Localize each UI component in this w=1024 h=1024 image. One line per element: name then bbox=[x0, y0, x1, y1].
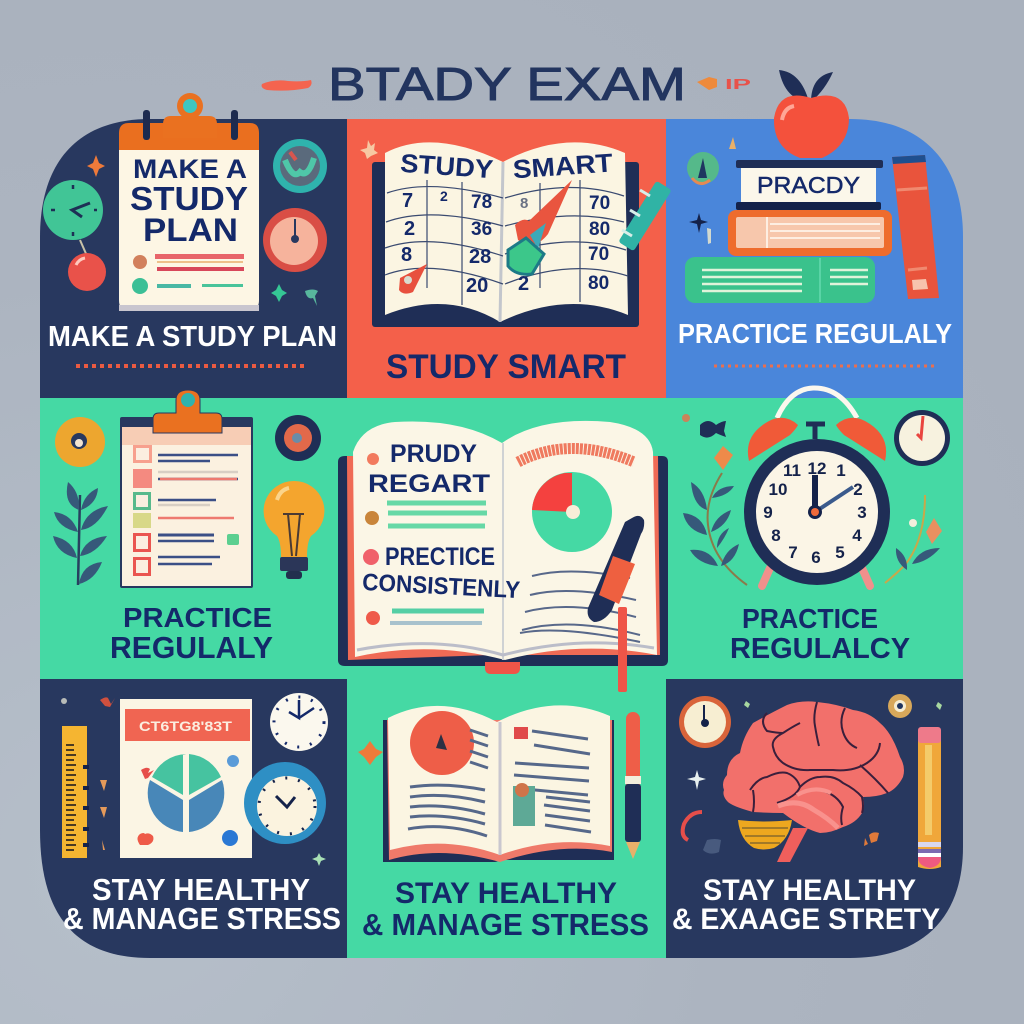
dotted divider bbox=[76, 364, 308, 368]
panel: make a study plan bbox=[43, 93, 337, 366]
ribbon bbox=[618, 607, 627, 692]
blue clock bbox=[244, 762, 326, 844]
small doodles bbox=[61, 697, 326, 866]
panel: practice regularly left: REGULALY bbox=[110, 630, 273, 665]
alarm clock: 3 bbox=[857, 503, 867, 522]
panel: practice regularly top bbox=[678, 70, 952, 366]
icon: brain bbox=[723, 701, 904, 862]
panel: alarm clock bbox=[682, 388, 950, 665]
small doodles bbox=[683, 694, 942, 854]
book stack bbox=[685, 155, 939, 303]
book pages bbox=[353, 421, 657, 660]
icon: red timer bbox=[263, 208, 327, 272]
open calendar book: 70 bbox=[589, 193, 610, 214]
left page text bbox=[362, 440, 521, 625]
alarm clock: 9 bbox=[763, 503, 773, 522]
alarm clock: 4 bbox=[852, 526, 862, 545]
small icons bbox=[687, 137, 736, 244]
alarm clock bbox=[744, 388, 890, 586]
icon: apple on books bbox=[774, 70, 849, 158]
panel: stay healthy left bbox=[61, 693, 341, 936]
panel: center open book bbox=[338, 421, 668, 692]
left page text: REGART bbox=[368, 470, 490, 498]
orange page edges bbox=[347, 456, 660, 660]
pen bbox=[625, 712, 641, 859]
study plan notepad bbox=[119, 93, 259, 311]
label: practice regularly: PRACTICE bbox=[742, 603, 878, 634]
pie chart report bbox=[120, 699, 252, 858]
icon: apple bbox=[68, 240, 106, 291]
alarm clock: 12 bbox=[808, 459, 826, 478]
study plan notepad: STUDY bbox=[130, 180, 248, 217]
alarm clock: 7 bbox=[788, 543, 798, 562]
alarm clock: 1 bbox=[836, 461, 846, 480]
alarm clock: 6 bbox=[811, 548, 821, 567]
open calendar book: 28 bbox=[469, 246, 491, 268]
label: practice regulaly: PRACTICE bbox=[123, 602, 272, 633]
label: make a study plan: MAKE A STUDY PLAN bbox=[48, 321, 337, 353]
small leaves left bbox=[683, 473, 747, 585]
open calendar book: 80 bbox=[588, 273, 609, 294]
panel: stay healthy middle bbox=[358, 705, 649, 942]
title bbox=[262, 58, 751, 110]
book cover bbox=[338, 456, 668, 666]
panel: practice regularly left bbox=[53, 390, 324, 665]
study plan notepad: PLAN bbox=[143, 212, 238, 248]
panel: stay healthy middle: & MANAGE STRESS bbox=[362, 907, 649, 942]
open calendar book: 36 bbox=[471, 219, 492, 240]
open calendar book: 20 bbox=[466, 275, 488, 297]
sparkles bbox=[87, 155, 318, 306]
study plan notepad: MAKE A bbox=[133, 154, 247, 184]
sparkle bbox=[358, 741, 383, 765]
label: stay healthy & manage stress: STAY HEALTHY bbox=[92, 872, 310, 907]
label: stay healthy & manage stress: STAY HEALTHY bbox=[395, 877, 617, 910]
open calendar book: STUDY bbox=[399, 148, 494, 184]
open calendar book bbox=[372, 142, 672, 327]
right page chart bbox=[518, 448, 640, 642]
panel backgrounds bbox=[40, 119, 966, 959]
pen bbox=[588, 516, 644, 622]
open calendar book: 8 bbox=[520, 195, 528, 212]
open calendar book: 7 bbox=[402, 190, 413, 212]
open calendar book: 8 bbox=[401, 244, 412, 266]
icon: checklist clipboard bbox=[120, 390, 253, 588]
open calendar book: 2 bbox=[440, 188, 448, 204]
icon: light bulb bbox=[264, 481, 324, 579]
pie chart report: CT6TG8'83T bbox=[139, 718, 233, 734]
small leaves right bbox=[885, 495, 942, 583]
white clock bbox=[270, 693, 328, 751]
panel: stay healthy left: & MANAGE STRESS bbox=[63, 901, 341, 936]
open calendar book: 80 bbox=[589, 219, 610, 240]
alarm clock: 11 bbox=[783, 461, 801, 480]
icon: pencil bbox=[918, 727, 941, 869]
open calendar book: 78 bbox=[471, 192, 492, 213]
dotted divider bbox=[714, 364, 935, 368]
title: BTADY EXAM bbox=[328, 58, 686, 110]
icon: ruler bbox=[62, 726, 89, 858]
open calendar book: 2 bbox=[404, 218, 415, 240]
icon: orange badge bbox=[55, 417, 105, 467]
title: IP bbox=[725, 76, 751, 93]
book spine tab bbox=[485, 662, 520, 674]
open calendar book: 70 bbox=[588, 244, 609, 265]
panel: study smart bbox=[360, 140, 672, 386]
icon: clock bbox=[679, 696, 731, 748]
left page text: CONSISTENLY bbox=[362, 569, 521, 604]
icon: open book bbox=[383, 705, 614, 862]
label: study smart: STUDY SMART bbox=[386, 348, 626, 386]
icon: green clock bbox=[43, 180, 103, 240]
alarm clock: 8 bbox=[771, 526, 781, 545]
alarm clock: 5 bbox=[835, 543, 845, 562]
alarm clock: 2 bbox=[853, 480, 863, 499]
open calendar book: SMART bbox=[512, 147, 614, 184]
small clock bbox=[894, 410, 950, 466]
panel: alarm clock: REGULALCY bbox=[730, 633, 910, 665]
small decoration bbox=[682, 414, 733, 470]
sparkle bbox=[360, 140, 378, 159]
open calendar book: 2 bbox=[518, 273, 529, 295]
panel: stay healthy right bbox=[672, 694, 942, 936]
alarm clock: 10 bbox=[769, 480, 787, 499]
icon: dark badge bbox=[275, 415, 321, 461]
panel: stay healthy right: & EXAAGE STRETY bbox=[672, 903, 940, 936]
icon: teal badge bbox=[273, 139, 327, 193]
left page text: PRUDY bbox=[390, 440, 477, 468]
book stack: PRACDY bbox=[757, 172, 860, 198]
label: stay healthy & exaage strety: STAY HEALTHY bbox=[703, 874, 916, 907]
icon: leaf sprig bbox=[53, 482, 108, 585]
label: practice regulaly: PRACTICE REGULALY bbox=[678, 318, 952, 349]
left page text: PRECTICE bbox=[385, 543, 495, 571]
